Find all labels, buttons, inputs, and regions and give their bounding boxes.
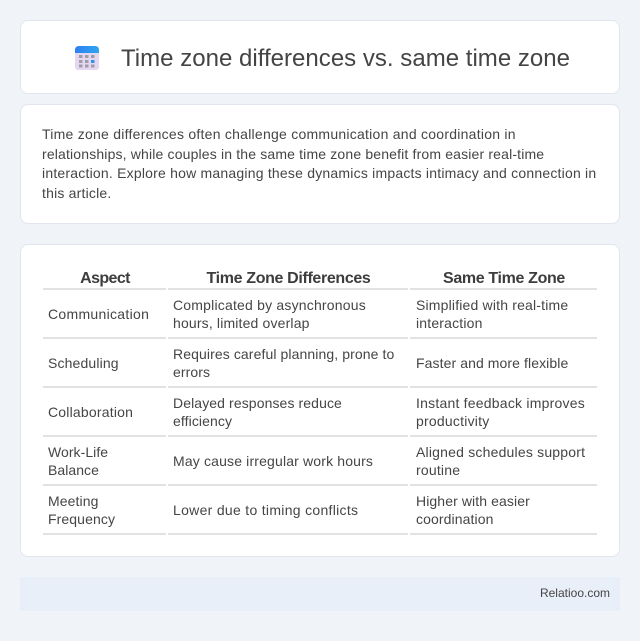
row: scheduling: Faster and more flexible [416, 355, 568, 371]
row: scheduling: errors [173, 364, 210, 380]
icon: calendar [75, 46, 99, 70]
row: collaboration [48, 395, 585, 429]
row: work-life balance: Work-Life [48, 444, 108, 460]
panel: comparison table [20, 244, 620, 557]
row: scheduling: Requires careful planning, prone to [173, 346, 394, 362]
row: collaboration: productivity [416, 413, 489, 429]
intro text: relationships, while couples in the same time zone benefit from easier real-time [42, 146, 544, 162]
table header [80, 270, 565, 287]
table header: Time Zone Differences [207, 270, 370, 287]
row: communication: Communication [48, 306, 149, 322]
row: communication: Simplified with real-time [416, 297, 568, 313]
row: meeting frequency: Meeting [48, 493, 99, 509]
row: meeting frequency: Frequency [48, 511, 115, 527]
footer text: Relatioo.com [540, 586, 610, 600]
row: scheduling [48, 346, 568, 380]
panel: title card [20, 20, 620, 94]
row: scheduling: Scheduling [48, 355, 119, 371]
title: Time zone differences vs. same time zone [121, 45, 570, 72]
row: meeting frequency: Higher with easier [416, 493, 530, 509]
row: meeting frequency [48, 493, 530, 527]
row: collaboration: efficiency [173, 413, 232, 429]
footer bar [20, 577, 620, 611]
panel: introduction [20, 104, 620, 224]
row: work-life balance [48, 444, 585, 478]
intro text [42, 126, 596, 200]
table header: Aspect [80, 270, 130, 287]
row: communication: hours, limited overlap [173, 315, 310, 331]
row: communication: Complicated by asynchronous [173, 297, 366, 313]
row: collaboration: Delayed responses reduce [173, 395, 342, 411]
row: communication [48, 297, 568, 331]
row: communication: interaction [416, 315, 483, 331]
row: meeting frequency: Lower due to timing conflicts [173, 502, 358, 518]
table header: Same Time Zone [443, 270, 565, 287]
intro text: Time zone differences often challenge communication and coordination in [42, 126, 516, 142]
intro text: interaction. Explore how managing these dynamics impacts intimacy and connection in [42, 165, 596, 181]
row: work-life balance: routine [416, 462, 460, 478]
row: meeting frequency: coordination [416, 511, 493, 527]
intro text: this article. [42, 184, 112, 200]
row: work-life balance: Balance [48, 462, 99, 478]
row: work-life balance: May cause irregular work hours [173, 453, 373, 469]
row: collaboration: Collaboration [48, 404, 133, 420]
row: collaboration: Instant feedback improves [416, 395, 585, 411]
row: work-life balance: Aligned schedules support [416, 444, 585, 460]
